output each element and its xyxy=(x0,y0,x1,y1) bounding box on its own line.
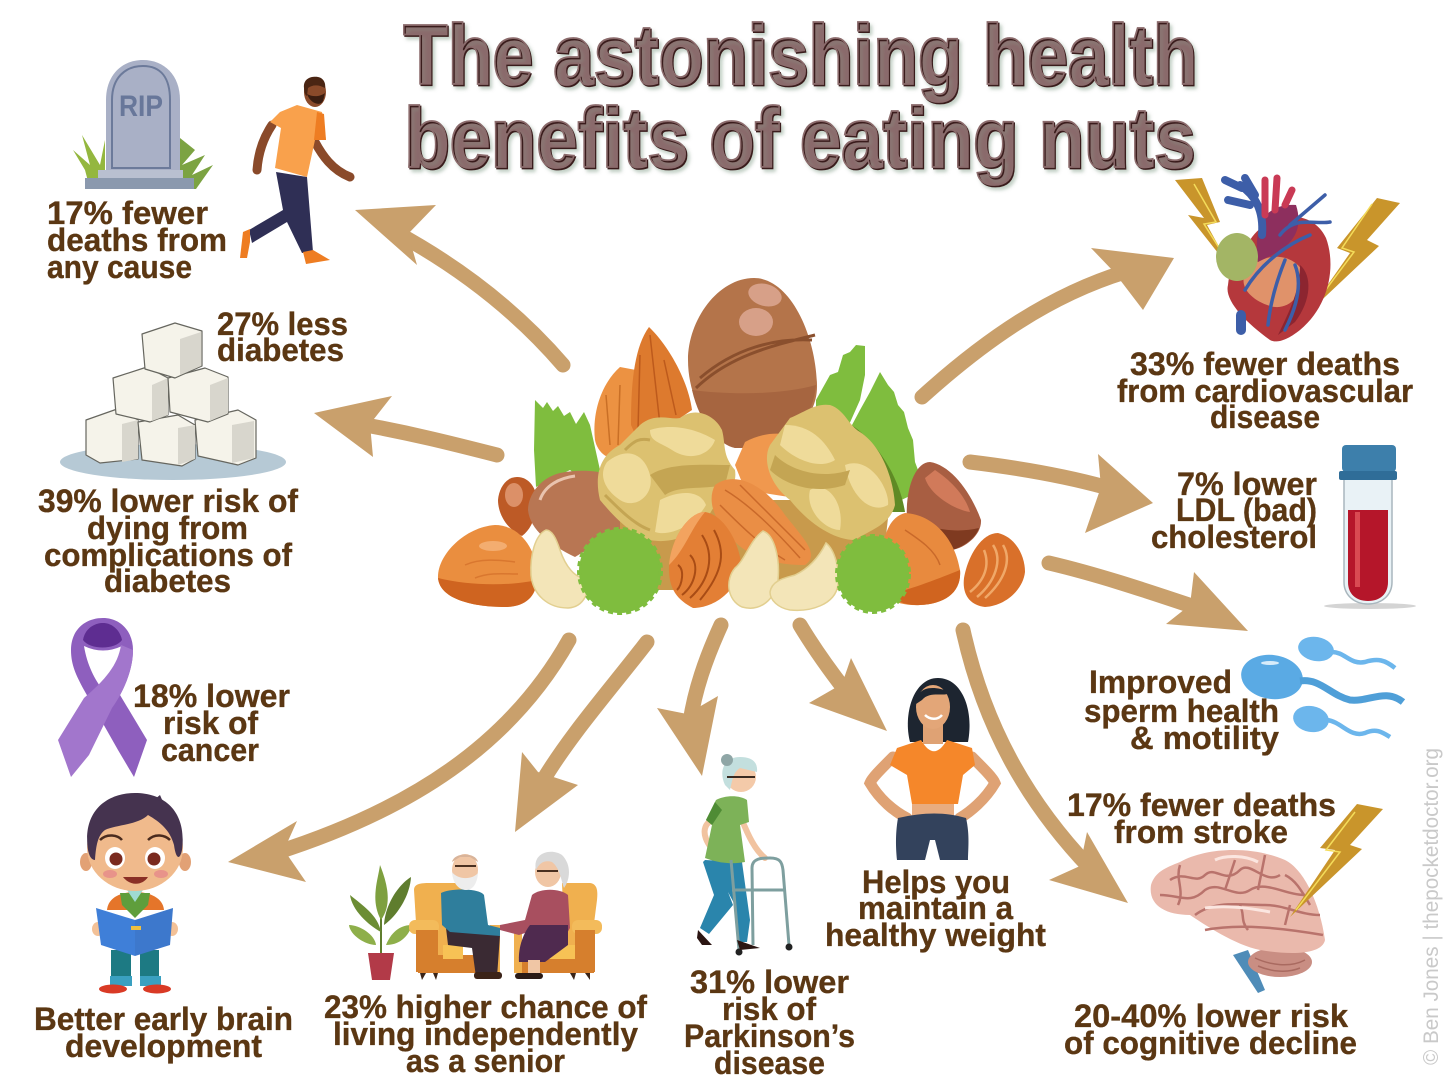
heart body xyxy=(1228,216,1330,341)
icon: fit woman, hands on hips xyxy=(870,678,995,860)
text: cardiovascular deaths xyxy=(1117,346,1413,435)
left armchair xyxy=(409,883,500,980)
text: cognitive decline: 20-40% lower risk xyxy=(1074,998,1348,1034)
almond right xyxy=(964,533,1025,607)
arrow: cholesterol xyxy=(970,454,1153,533)
text: healthy weight: healthy weight xyxy=(825,917,1046,953)
text: Parkinson's xyxy=(684,964,855,1081)
top sperm xyxy=(1296,634,1395,668)
hazelnut far left xyxy=(438,525,537,607)
text: independent living: living independently xyxy=(333,1016,638,1052)
text: Parkinson's: disease xyxy=(714,1045,825,1081)
large sperm xyxy=(1238,651,1403,703)
text: LDL cholesterol: LDL (bad) xyxy=(1176,492,1317,528)
text: brain development: development xyxy=(65,1028,262,1064)
plant xyxy=(349,865,412,980)
arrow: cardiovascular xyxy=(922,248,1174,397)
text: diabetes complications: 39% lower risk of xyxy=(38,483,298,519)
hazelnut right xyxy=(882,513,960,605)
text: LDL cholesterol: 7% lower xyxy=(1177,466,1317,502)
text: cardiovascular deaths: 33% fewer deaths xyxy=(1130,346,1400,382)
text: 27% less diabetes: 27% less xyxy=(217,306,348,342)
text: LDL cholesterol xyxy=(1151,466,1317,555)
text: healthy weight: Helps you xyxy=(862,864,1010,900)
title: benefits of eating nuts xyxy=(404,91,1195,186)
text: 27% less diabetes: diabetes xyxy=(217,332,344,368)
nut pile xyxy=(438,278,1025,613)
almonds at the back xyxy=(594,327,692,459)
icon: walking man xyxy=(240,77,350,264)
arrow: diabetes xyxy=(314,396,497,457)
woman xyxy=(500,852,570,979)
text: healthy weight xyxy=(825,864,1046,953)
cerebrum xyxy=(1151,850,1325,953)
text: sperm health: Improved xyxy=(1089,664,1232,700)
right armchair xyxy=(514,883,602,980)
text: cardiovascular deaths: disease xyxy=(1210,399,1320,435)
text: cancer: 18% lower xyxy=(133,678,290,714)
text: sperm health xyxy=(1084,664,1279,756)
top cube xyxy=(142,323,202,378)
icon: senior couple on armchairs with plant xyxy=(349,852,602,980)
text: Parkinson's: Parkinson’s xyxy=(684,1018,855,1054)
small brown nut and left brown nut xyxy=(498,471,620,557)
text: diabetes complications xyxy=(38,483,298,599)
icon: tombstone with RIP xyxy=(73,60,213,189)
icon: anatomical heart with lightning bolts xyxy=(1175,178,1400,341)
icon: sugar cubes xyxy=(60,323,286,480)
left walnut xyxy=(598,412,735,541)
bottom row cubes xyxy=(86,408,256,466)
icon: sperm cells xyxy=(1238,634,1403,737)
text: stroke xyxy=(1067,787,1336,850)
centre orange nut xyxy=(735,434,815,500)
pecan xyxy=(688,278,817,448)
text: cognitive decline: of cognitive decline xyxy=(1064,1025,1357,1061)
text: brain development xyxy=(34,1001,293,1064)
text: all-cause deaths: any cause xyxy=(47,249,192,285)
text: healthy weight: maintain a xyxy=(858,890,1013,926)
icon: purple cancer ribbon xyxy=(58,618,147,777)
text: diabetes complications: complications of xyxy=(44,537,292,573)
lightning xyxy=(1290,804,1383,917)
icon: brain with lightning bolt xyxy=(1151,804,1383,993)
text: cancer: cancer xyxy=(161,732,259,768)
arrow: healthy weight xyxy=(800,625,887,731)
text: independent living: 23% higher chance of xyxy=(324,989,647,1025)
tan fill behind lower pile xyxy=(610,500,890,590)
left lightning xyxy=(1175,178,1233,272)
man xyxy=(441,854,502,979)
centre almond xyxy=(712,479,811,565)
text: cancer xyxy=(133,678,290,768)
green leaf clusters xyxy=(579,529,909,613)
text: Parkinson's: 31% lower xyxy=(690,964,849,1000)
arrow: independent living xyxy=(515,642,647,832)
text: all-cause deaths: 17% fewer xyxy=(47,195,208,231)
text: cardiovascular deaths: from cardiovascular xyxy=(1117,373,1413,409)
text: Parkinson's: risk of xyxy=(722,991,816,1027)
title xyxy=(403,8,1197,186)
arrow: sperm health xyxy=(1049,563,1248,631)
text: independent living: as a senior xyxy=(406,1043,565,1079)
arrow: brain development xyxy=(228,640,569,882)
vessels xyxy=(1225,178,1330,330)
almond lower middle xyxy=(669,512,741,608)
text: diabetes complications: diabetes xyxy=(104,563,231,599)
icon: tombstone with RIP: RIP xyxy=(119,90,163,123)
arrow: stroke and cognition xyxy=(963,630,1128,903)
middle row cubes xyxy=(113,367,228,422)
atrium xyxy=(1216,233,1258,281)
text: 27% less diabetes xyxy=(217,306,348,368)
right walnut xyxy=(767,405,895,540)
text: cancer: risk of xyxy=(163,705,258,741)
text: stroke: 17% fewer deaths xyxy=(1067,787,1336,823)
text: all-cause deaths xyxy=(47,195,227,285)
text: diabetes complications: dying from xyxy=(87,510,248,546)
text: all-cause deaths: deaths from xyxy=(47,222,227,258)
arrow: all-cause deaths xyxy=(355,205,563,365)
right lightning xyxy=(1308,198,1400,313)
text: sperm health: sperm health xyxy=(1084,693,1279,729)
icon: boy reading book xyxy=(80,793,191,994)
text: cognitive decline xyxy=(1064,998,1357,1061)
leaves xyxy=(534,345,918,510)
brain stem and cerebellum xyxy=(1233,950,1265,993)
brown nut right xyxy=(907,462,981,550)
arrow: Parkinson's xyxy=(657,625,721,776)
icon: elderly woman with walker xyxy=(697,754,792,956)
icon: blood test tube xyxy=(1324,445,1416,609)
text: independent living xyxy=(324,989,647,1079)
text: brain development: Better early brain xyxy=(34,1001,293,1037)
text: sperm health: & motility xyxy=(1130,720,1279,756)
lower sperm xyxy=(1291,703,1390,737)
text: stroke: from stroke xyxy=(1114,814,1288,850)
cashews xyxy=(531,530,838,610)
title: The astonishing health xyxy=(403,8,1197,103)
watermark credit: © Ben Jones | thepocketdoctor.org xyxy=(1420,748,1443,1065)
text: LDL cholesterol: cholesterol xyxy=(1151,519,1317,555)
arrows from nuts to each benefit xyxy=(228,205,1248,903)
